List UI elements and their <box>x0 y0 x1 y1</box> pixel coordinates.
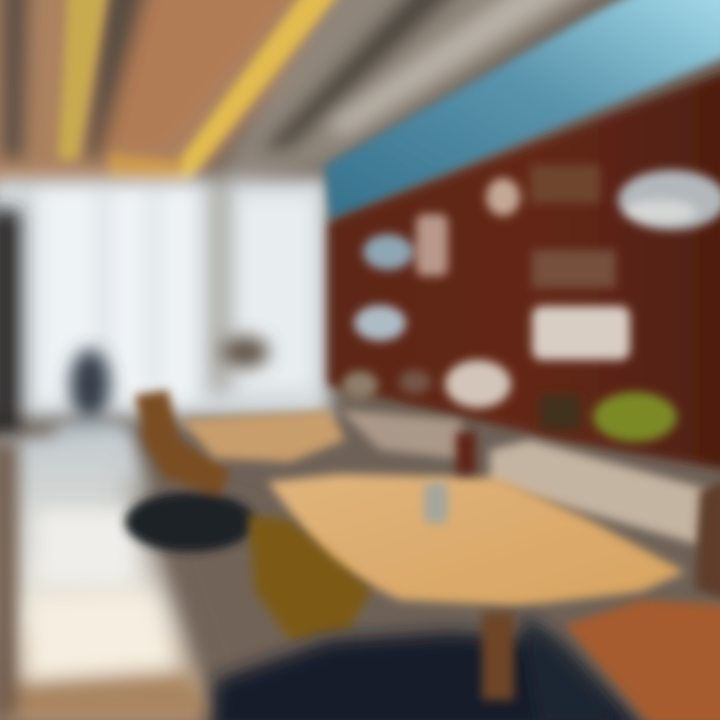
bench seating <box>490 440 710 545</box>
left dark column and figures <box>0 210 269 475</box>
foreground bench <box>565 600 720 720</box>
wall shelves and display objects <box>342 165 720 442</box>
ceiling: yellow light strips <box>58 0 342 184</box>
window wall <box>0 178 330 418</box>
floor <box>0 430 220 720</box>
front chair <box>248 515 372 640</box>
table centerpiece vase <box>424 432 476 524</box>
foreground dark chairs <box>210 612 650 720</box>
table leg <box>482 612 514 700</box>
main table top <box>268 474 685 606</box>
back table and chairs <box>125 390 470 552</box>
ceiling: wood and grey panels <box>0 0 620 190</box>
brown wall <box>328 70 720 470</box>
blue beam <box>325 0 720 222</box>
